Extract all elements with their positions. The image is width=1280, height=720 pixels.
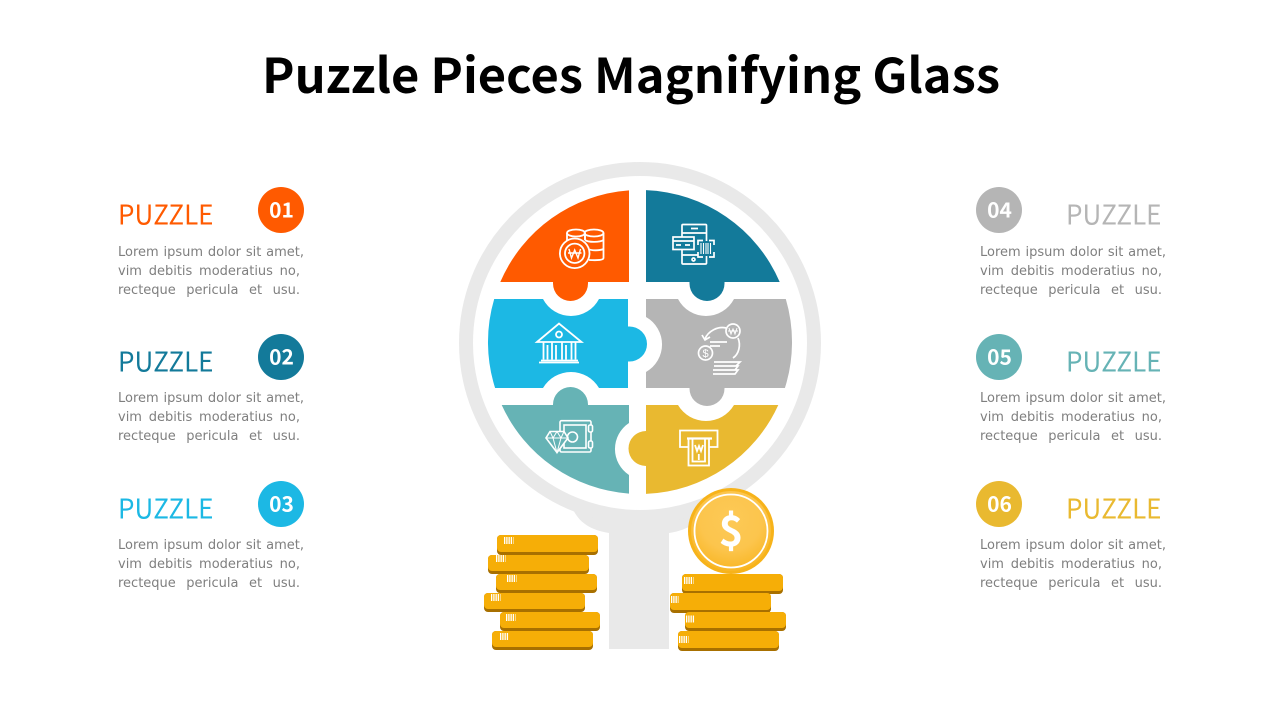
dollar coin: $ bbox=[719, 498, 743, 559]
puzzle piece: dark teal bbox=[646, 190, 780, 301]
badge 06: 06 bbox=[987, 488, 1012, 518]
puzzle piece: gray bbox=[646, 299, 792, 406]
badge 02: 02 bbox=[269, 342, 294, 372]
puzzle piece: yellow bbox=[629, 405, 778, 494]
heading: puzzle 06: PUZZLE bbox=[1066, 486, 1162, 526]
puzzle piece: blue bbox=[488, 299, 647, 388]
text block 04: vim debitis moderatius no, bbox=[980, 264, 1162, 279]
badge 05 bbox=[976, 334, 1022, 380]
text block 01: Lorem ipsum dolor sit amet, bbox=[118, 245, 304, 260]
heading: puzzle 04: PUZZLE bbox=[1066, 192, 1162, 232]
icon: phone with barcode bbox=[673, 224, 714, 264]
coin stack: left bbox=[484, 535, 600, 650]
icon: safe and diamond bbox=[546, 421, 592, 452]
text block 02: vim debitis moderatius no, bbox=[118, 410, 300, 425]
text block 01: vim debitis moderatius no, bbox=[118, 264, 300, 279]
text block 04: Lorem ipsum dolor sit amet, bbox=[980, 245, 1166, 260]
puzzle piece: light teal bbox=[502, 387, 629, 494]
badge 03: 03 bbox=[269, 488, 294, 518]
badge 04: 04 bbox=[987, 194, 1012, 224]
badge 06 bbox=[976, 481, 1022, 527]
text block 05: Lorem ipsum dolor sit amet, bbox=[980, 391, 1166, 406]
icon: won coins bbox=[560, 230, 604, 268]
text block 06: recteque pericula et usu. bbox=[980, 576, 1162, 591]
text block 04 bbox=[980, 245, 1166, 298]
text block 06: vim debitis moderatius no, bbox=[980, 557, 1162, 572]
text block 03 bbox=[118, 538, 304, 591]
title: Puzzle Pieces Magnifying Glass bbox=[262, 37, 1000, 107]
text block 05: recteque pericula et usu. bbox=[980, 429, 1162, 444]
magnifying glass ring bbox=[466, 169, 814, 517]
text block 05: vim debitis moderatius no, bbox=[980, 410, 1162, 425]
text block 06 bbox=[980, 538, 1166, 591]
text block 06: Lorem ipsum dolor sit amet, bbox=[980, 538, 1166, 553]
badge 01: 01 bbox=[269, 194, 294, 224]
badge 02 bbox=[258, 334, 304, 380]
heading: puzzle 03: PUZZLE bbox=[118, 486, 214, 526]
puzzle piece: orange bbox=[500, 190, 629, 301]
badge 01 bbox=[258, 187, 304, 233]
icon: currency exchange bbox=[698, 324, 740, 374]
text block 03: Lorem ipsum dolor sit amet, bbox=[118, 538, 304, 553]
heading: puzzle 01: PUZZLE bbox=[118, 192, 214, 232]
magnifying glass handle bbox=[572, 507, 708, 649]
badge 05: 05 bbox=[987, 342, 1012, 372]
heading: puzzle 05: PUZZLE bbox=[1066, 340, 1162, 380]
icon label: dollar: $ bbox=[702, 348, 709, 360]
text block 02: recteque pericula et usu. bbox=[118, 429, 300, 444]
text block 03: recteque pericula et usu. bbox=[118, 576, 300, 591]
icon: bank bbox=[537, 324, 582, 362]
text block 01: recteque pericula et usu. bbox=[118, 283, 300, 298]
text block 04: recteque pericula et usu. bbox=[980, 283, 1162, 298]
dollar coin bbox=[688, 488, 774, 574]
coin stack: right bbox=[670, 574, 786, 651]
icon: ATM bbox=[680, 430, 718, 466]
badge 03 bbox=[258, 481, 304, 527]
text block 02: Lorem ipsum dolor sit amet, bbox=[118, 391, 304, 406]
text block 05 bbox=[980, 391, 1166, 444]
heading: puzzle 02: PUZZLE bbox=[118, 340, 214, 380]
text block 02 bbox=[118, 391, 304, 444]
text block 01 bbox=[118, 245, 304, 298]
badge 04 bbox=[976, 187, 1022, 233]
text block 03: vim debitis moderatius no, bbox=[118, 557, 300, 572]
